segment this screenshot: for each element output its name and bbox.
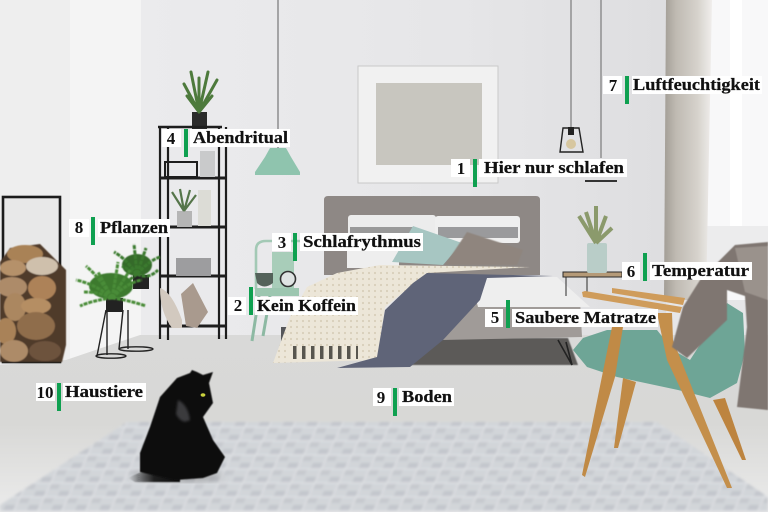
fur throw xyxy=(672,242,768,410)
pillows xyxy=(348,215,436,249)
knit blanket xyxy=(273,265,530,363)
label 6: Temperatur: Temperatur xyxy=(652,261,749,280)
label 1: Hier nur schlafen: 1 xyxy=(457,159,465,178)
label 8: Pflanzen xyxy=(69,217,170,245)
bed leg xyxy=(558,340,572,365)
bed base xyxy=(430,300,582,340)
label 3: Schlafrythmus: Schlafrythmus xyxy=(303,232,421,251)
bed xyxy=(273,196,590,368)
label 6: Temperatur: 6 xyxy=(627,262,635,281)
green chair with cup and alarm clock xyxy=(252,241,300,341)
front right leg xyxy=(657,313,732,488)
underbed shadow xyxy=(380,338,578,365)
armchair xyxy=(573,288,746,488)
wall art xyxy=(358,66,498,183)
label 5: Saubere Matratze xyxy=(485,300,658,328)
label 2: Kein Koffein xyxy=(228,287,358,315)
label 7: Luftfeuchtigkeit xyxy=(603,75,762,104)
label 4: Abendritual: 4 xyxy=(167,129,176,148)
seat xyxy=(573,303,745,398)
label 10: Haustiere: Haustiere xyxy=(65,382,143,401)
label 4: Abendritual: Abendritual xyxy=(193,128,288,147)
label 3: Schlafrythmus: 3 xyxy=(278,233,286,252)
label 1: Hier nur schlafen xyxy=(451,158,627,187)
small plant on shelf top xyxy=(184,72,217,129)
black cat xyxy=(128,370,225,482)
label 9: Boden: Boden xyxy=(402,387,453,406)
label 5: Saubere Matratze: Saubere Matratze xyxy=(515,308,656,327)
pendant lamp green xyxy=(255,0,300,175)
mattress xyxy=(470,277,590,307)
label 3: Schlafrythmus xyxy=(272,232,423,261)
label 4: Abendritual xyxy=(162,128,290,157)
dark throw xyxy=(337,273,553,368)
ferns in stands xyxy=(76,244,160,358)
label 5: Saubere Matratze: 5 xyxy=(491,308,499,327)
label 7: Luftfeuchtigkeit: 7 xyxy=(609,76,618,95)
firewood rack xyxy=(0,197,66,362)
label 7: Luftfeuchtigkeit: Luftfeuchtigkeit xyxy=(633,75,760,94)
label 6: Temperatur xyxy=(622,253,752,281)
label 10: Haustiere: 10 xyxy=(36,383,54,402)
rug xyxy=(0,422,768,512)
back left leg xyxy=(614,378,636,448)
label 2: Kein Koffein: Kein Koffein xyxy=(257,296,357,315)
label 8: Pflanzen: 8 xyxy=(75,218,83,237)
shelf xyxy=(158,127,227,340)
rear arm xyxy=(612,288,685,305)
front arm xyxy=(582,291,682,313)
label 8: Pflanzen: Pflanzen xyxy=(100,218,169,237)
pendant lamps right xyxy=(560,0,617,181)
front left leg xyxy=(582,327,623,477)
window and curtain xyxy=(664,0,768,300)
label 10: Haustiere xyxy=(36,382,146,411)
back right leg xyxy=(713,398,746,460)
headboard xyxy=(324,196,540,275)
label 9: Boden xyxy=(373,387,454,416)
left bed side xyxy=(281,327,295,360)
label 9: Boden: 9 xyxy=(377,388,385,407)
label 2: Kein Koffein: 2 xyxy=(234,296,242,315)
label 1: Hier nur schlafen: Hier nur schlafen xyxy=(484,158,625,177)
bedside table with vase xyxy=(563,206,622,296)
